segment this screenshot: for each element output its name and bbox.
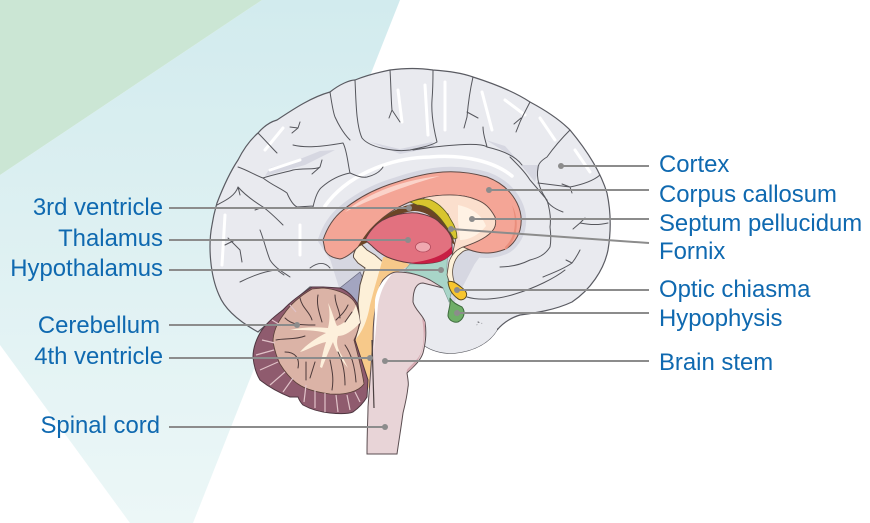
label: Corpus callosum [486,181,837,208]
label: Optic chiasma [454,276,811,303]
hypothalamus tissue [404,250,452,302]
label: Fornix: Fornix [659,238,725,265]
label: Spinal cord: Spinal cord [40,412,160,439]
label: Septum pellucidum: Septum pellucidum [659,210,862,237]
label: 3rd ventricle: 3rd ventricle [33,194,163,221]
hypophysis [448,298,464,322]
cream strip below septum [447,247,470,287]
label: 4th ventricle: 4th ventricle [34,343,163,370]
corpus callosum [323,172,521,259]
posterior median line [372,340,374,408]
grey-blue shadow between cerebellum and stem [340,272,366,305]
cerebellum [253,287,368,414]
background: light blue wedge [0,0,400,523]
label: 3rd ventricle [33,194,412,221]
label: Brain stem [382,349,773,376]
label: Optic chiasma: Optic chiasma [659,276,811,303]
optic chiasma [448,281,467,300]
label: Corpus callosum: Corpus callosum [659,181,837,208]
temporal pole fold [413,283,497,353]
shading around corpus callosum [323,172,521,300]
label: Hypophysis: Hypophysis [659,305,783,332]
fornix [410,199,457,239]
label: Cortex: Cortex [659,151,729,178]
interthalamic adhesion [416,242,430,252]
orange aqueduct region [355,257,410,402]
label: Cerebellum: Cerebellum [38,312,160,339]
label: Hypophysis [454,305,783,332]
septum pellucidum [423,195,496,256]
label: Hypothalamus [10,255,444,282]
label: Fornix [448,226,725,265]
label: Cortex [558,151,729,178]
thalamus lower crimson rim [410,246,452,264]
label: Hypothalamus: Hypothalamus [10,255,163,282]
shading on gyri [265,140,540,182]
label: Septum pellucidum [469,210,862,237]
brain stem and spinal cord [367,272,443,454]
thalamus [365,213,452,264]
cerebral cortex [210,68,610,353]
cerebellum inner tissue [273,288,364,394]
cerebellum folia stripes [256,305,360,412]
label: 4th ventricle [34,343,373,370]
cortex sulci [355,70,437,150]
brain illustration [210,68,610,454]
label: Brain stem: Brain stem [659,349,773,376]
gyri highlights [325,156,512,206]
label: Thalamus: Thalamus [58,225,163,252]
cerebellum white matter branches [290,303,360,368]
background: green wedge [0,0,262,175]
label: Thalamus [58,225,411,252]
label: Cerebellum [38,312,300,339]
label: Spinal cord [40,412,388,439]
cerebellum outer folia [253,287,368,414]
third ventricle brown band [358,204,455,247]
cream midbrain structures [352,243,383,341]
